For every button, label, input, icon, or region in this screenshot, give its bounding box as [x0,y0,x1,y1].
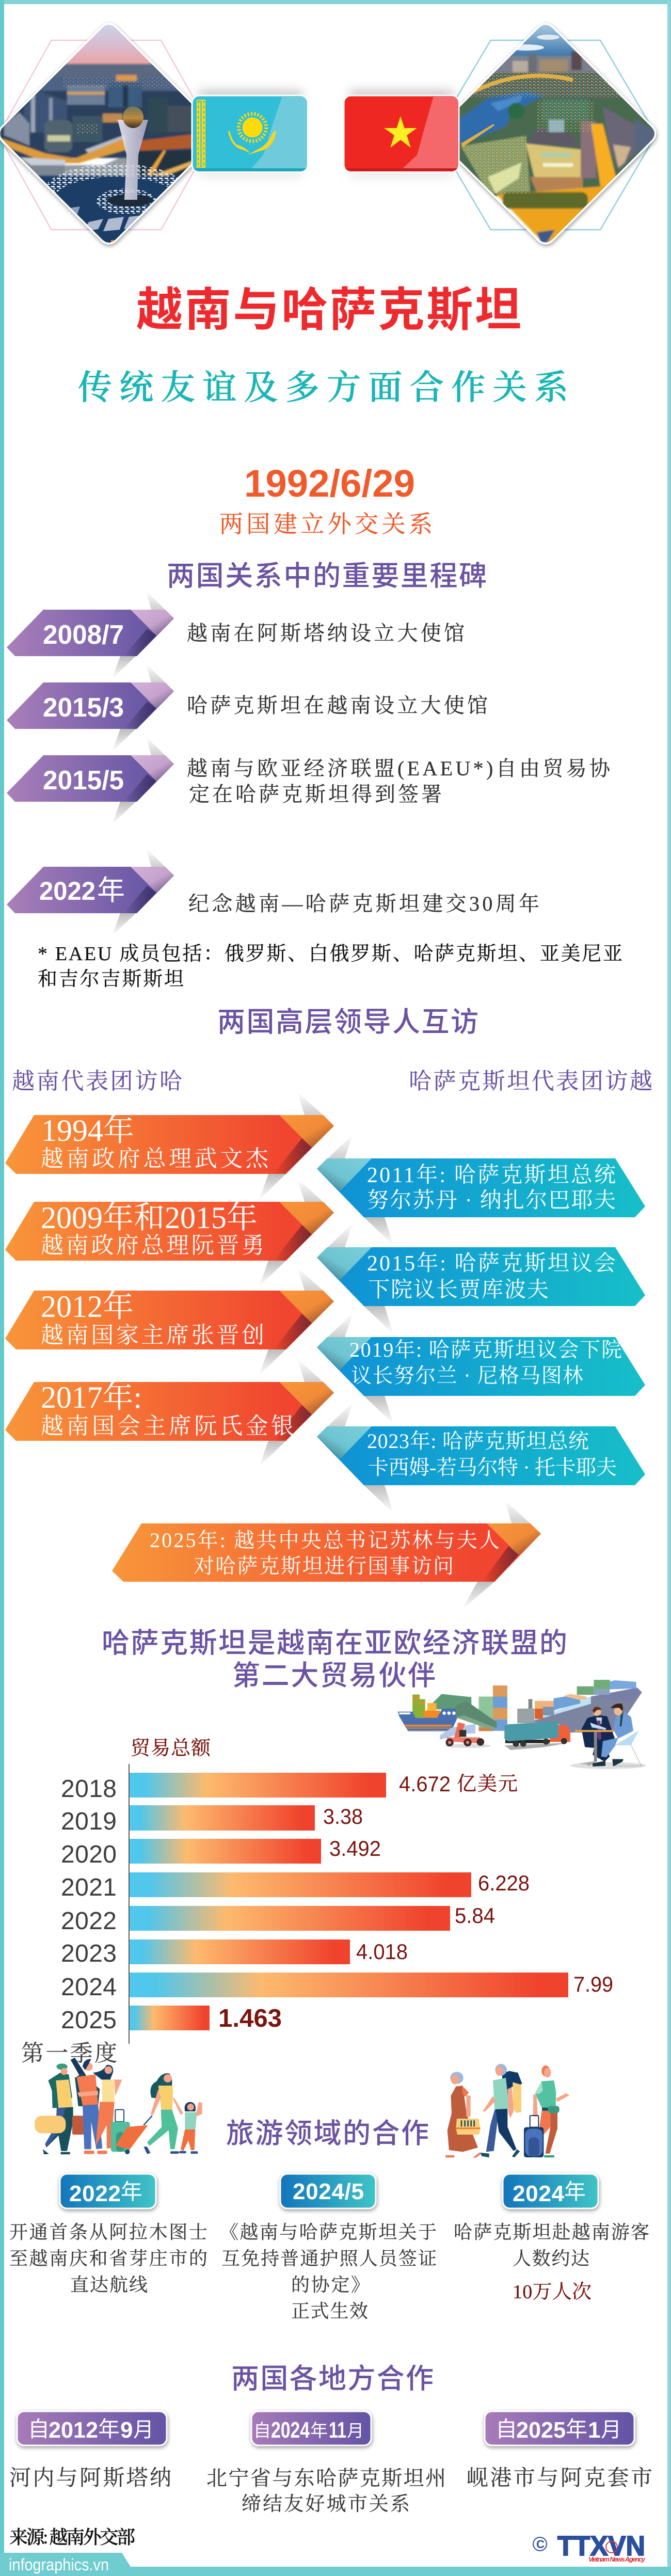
badge 2024: 年 [564,2180,586,2204]
panel: local cooperation 2025: 岘港市与阿克套市 [467,2467,652,2490]
visit 2025: 对哈萨克斯坦进行国事访问 [194,1554,454,1578]
sun and eagle [228,114,276,155]
heading: local cooperation: 两国各地方合作 [231,2363,434,2394]
badge 2025/1: 自 [496,2417,517,2441]
visit 2009 and 2015 [5,1179,334,1286]
note: EAEU members: 和吉尔吉斯斯坦 [38,968,184,990]
badge 2024 [503,2174,598,2208]
hexagon outline: Kazakhstan [0,40,214,230]
bar 2019: 2019 [61,1808,117,1835]
visit 2015: 下院议长贾库波夫 [368,1278,549,1302]
photo: Astana skyline diamond [0,22,193,249]
bar 2022: 2022 [61,1907,117,1935]
flag: Vietnam [344,96,459,172]
bar 2020: 3.492 [329,1836,381,1861]
bar 2018: 亿美元 [457,1773,518,1795]
badge 2012/9: 月 [133,2419,154,2441]
panel: local cooperation 2012 [9,2411,171,2490]
visit 2015 [317,1223,645,1334]
panel: local cooperation 2024: 缔结友好城市关系 [242,2493,410,2515]
panel: tourism 2022: 直达航线 [70,2275,148,2295]
illustration: walking travellers [445,2064,569,2158]
bar 2024: 7.99 [573,1972,613,1996]
badge 2025/1: 2025 [516,2418,566,2443]
badge 2024/11: 自 [253,2421,271,2441]
chart axis title: 贸易总额 [131,1738,211,1759]
bar 2018: 4.672 [399,1772,451,1796]
badge 2024/11: 11 [329,2418,346,2443]
panel: tourism 2024/5 [220,2174,437,2321]
column label: Vietnam delegations: 越南代表团访哈 [12,1069,182,1094]
bar 2018: 2018 [61,1775,117,1803]
milestone 2022: 2022 [39,877,95,905]
note: EAEU members: * EAEU 成员包括：俄罗斯、白俄罗斯、哈萨克斯坦、亚美尼亚 [38,943,622,965]
bar 2018 [61,1772,518,1803]
panel: local cooperation 2012: 河内与阿斯塔纳 [9,2466,171,2490]
visit 2009 and 2015: 越南政府总理阮晋勇 [41,1233,264,1258]
visit 2025: 2025年: 越共中央总书记苏林与夫人 [150,1529,500,1552]
visit 2019: 议长努尔兰 · 尼格马图林 [351,1364,583,1387]
badge 2022 [60,2174,156,2208]
visit 2011: 2011年: 哈萨克斯坦总统 [367,1163,616,1187]
milestone 2015/3: 2015/3 [43,693,124,723]
bar 2024: 2024 [61,1974,117,2001]
logo: TTXVN: Vietnam News Agency [588,2555,646,2563]
source: 来源: 越南外交部 [9,2527,135,2548]
milestone 2015/5: 2015/5 [43,766,124,796]
badge 2024/5: 2024/5 [293,2179,364,2204]
badge 2022: 年 [121,2180,142,2204]
established date: 两国建立外交关系 [219,511,433,537]
established date [219,462,433,537]
footer bar: infographics.vn [9,2555,109,2574]
axis [129,1764,130,2044]
bar 2021: 6.228 [478,1871,530,1895]
bar 2022: 5.84 [455,1903,495,1928]
title: 越南与哈萨克斯坦 [136,284,521,336]
column label: Kazakhstan delegations: 哈萨克斯坦代表团访越 [409,1069,652,1094]
heading: tourism: 旅游领域的合作 [226,2118,429,2149]
photo: Hanoi cityscape diamond [459,22,660,249]
visit 2023: 卡西姆-若马尔特 · 托卡耶夫 [368,1456,617,1479]
bar 2020 [61,1836,381,1868]
badge 2012/9 [17,2411,167,2445]
logo: TTXVN: TTXVN [557,2531,645,2562]
flag: Kazakhstan [192,96,310,172]
bar 2020: 2020 [61,1841,117,1868]
visit 2011: 努尔苏丹 · 纳扎尔巴耶夫 [367,1188,616,1213]
bar 2023: 4.018 [356,1939,408,1964]
bar 2024 [61,1972,613,2001]
milestone 2022 [7,848,539,936]
milestone 2022: 纪念越南—哈萨克斯坦建交30周年 [188,892,539,915]
subtitle: 传统友谊及多方面合作关系 [78,369,568,407]
panel: tourism 2022: 至越南庆和省芽庄市的 [9,2248,207,2269]
bar 2019: 3.38 [323,1804,363,1828]
milestone 2015/5: 定在哈萨克斯坦得到签署 [189,783,442,806]
visit 2012: 2012年 [41,1290,134,1324]
milestone 2008/7: 越南在阿斯塔纳设立大使馆 [187,622,465,645]
hexagon outline: Vietnam [435,40,656,230]
badge 2012/9: 2012 [49,2418,98,2443]
ornament strip [197,100,205,168]
badge 2012/9: 年 [98,2417,120,2441]
heading: trade partner: 哈萨克斯坦是越南在亚欧经济联盟的 [102,1628,567,1659]
visit 2012: 越南国家主席张晋创 [41,1323,264,1348]
visit 2011 [317,1134,645,1245]
heading: trade partner [102,1628,567,1691]
visit 1994 [5,1092,334,1200]
panel: tourism 2024/5: 的协定》 [291,2275,370,2295]
bar 2023: 2023 [61,1940,117,1967]
footer bar [0,2553,671,2576]
visit 2017: 2017年: [41,1380,142,1414]
visit 2015: 2015年: 哈萨克斯坦议会 [367,1251,616,1276]
milestone 2015/3: 哈萨克斯坦在越南设立大使馆 [187,694,488,717]
bar 2025: 1.463 [218,2005,282,2032]
badge 2024/11: 2024 [271,2418,310,2443]
panel: tourism 2022 [9,2174,207,2295]
badge 2012/9: 自 [28,2417,50,2441]
panel: tourism 2024: 人数约达 [513,2248,589,2269]
panel: tourism 2024 [454,2174,649,2303]
badge 2022: 2022 [69,2181,121,2206]
visit 1994: 越南政府总理武文杰 [41,1146,269,1171]
panel: tourism 2024/5: 正式生效 [291,2301,368,2321]
milestone 2015/3 [7,664,488,752]
panel: tourism 2022: 开通首条从阿拉木图士 [9,2222,207,2243]
bar 2023 [61,1939,408,1967]
badge 2012/9: 9 [120,2418,133,2443]
heading: milestones: 两国关系中的重要里程碑 [167,561,487,592]
panel: local cooperation 2024: 北宁省与东哈萨克斯坦州 [206,2467,446,2490]
visit 2019 [317,1313,645,1424]
badge 2025/1: 年 [566,2417,587,2441]
visit 2025 [112,1500,541,1610]
bar chart: total trade [61,1738,613,2044]
badge 2024/5 [280,2174,376,2208]
badge 2025/1 [485,2411,634,2445]
bar 2019 [61,1804,363,1835]
bar 2022 [61,1903,495,1935]
visit 2009 and 2015: 2009年和2015年 [41,1201,258,1235]
logo: TTXVN: C [536,2538,545,2551]
milestone 2008/7 [7,591,465,679]
bar 2021 [61,1871,530,1901]
panel: tourism 2024: 哈萨克斯坦赴越南游客 [454,2222,649,2243]
badge 2024/11 [251,2411,371,2445]
flag shadows [199,91,453,176]
bar 2025: 2025 [61,2007,117,2034]
badge 2025/1: 月 [601,2419,621,2441]
milestone 2022: 年 [97,875,125,906]
bar 2025 [61,2005,282,2034]
milestone 2008/7: 2008/7 [43,620,124,650]
illustration: port, ships, truck and businessmen [398,1680,646,1769]
label: first quarter: 第一季度 [21,2041,117,2066]
milestone 2015/5: 越南与欧亚经济联盟(EAEU*)自由贸易协 [187,757,611,780]
panel: tourism 2024/5: 《越南与哈萨克斯坦关于 [220,2222,437,2243]
visit 2012 [5,1267,334,1375]
panel: tourism 2024: 10万人次 [513,2281,592,2303]
badge 2024: 2024 [513,2181,565,2206]
panel: local cooperation 2025 [467,2411,652,2490]
badge 2024/11: 年 [310,2421,328,2441]
visit 2017 [5,1359,334,1467]
established date: 1992/6/29 [244,462,415,505]
visit 2017: 越南国会主席阮氏金银 [41,1413,294,1439]
milestone 2015/5 [7,737,611,824]
visit 2019: 2019年: 哈萨克斯坦议会下院 [349,1338,622,1361]
heading: trade partner: 第二大贸易伙伴 [232,1660,436,1691]
visit 2023 [317,1402,645,1513]
bar 2021: 2021 [61,1874,117,1901]
heading: high-level visits: 两国高层领导人互访 [217,1007,478,1038]
badge 2024/11: 月 [347,2421,364,2440]
visit 2023: 2023年: 哈萨克斯坦总统 [367,1429,589,1453]
badge 2025/1: 1 [588,2418,600,2443]
visit 1994: 1994年 [41,1114,134,1148]
panel: tourism 2024/5: 互免持普通护照人员签证 [221,2248,437,2269]
panel: local cooperation 2024 [206,2411,446,2515]
note: EAEU members [38,943,622,990]
illustration: group of travellers [35,2058,202,2154]
